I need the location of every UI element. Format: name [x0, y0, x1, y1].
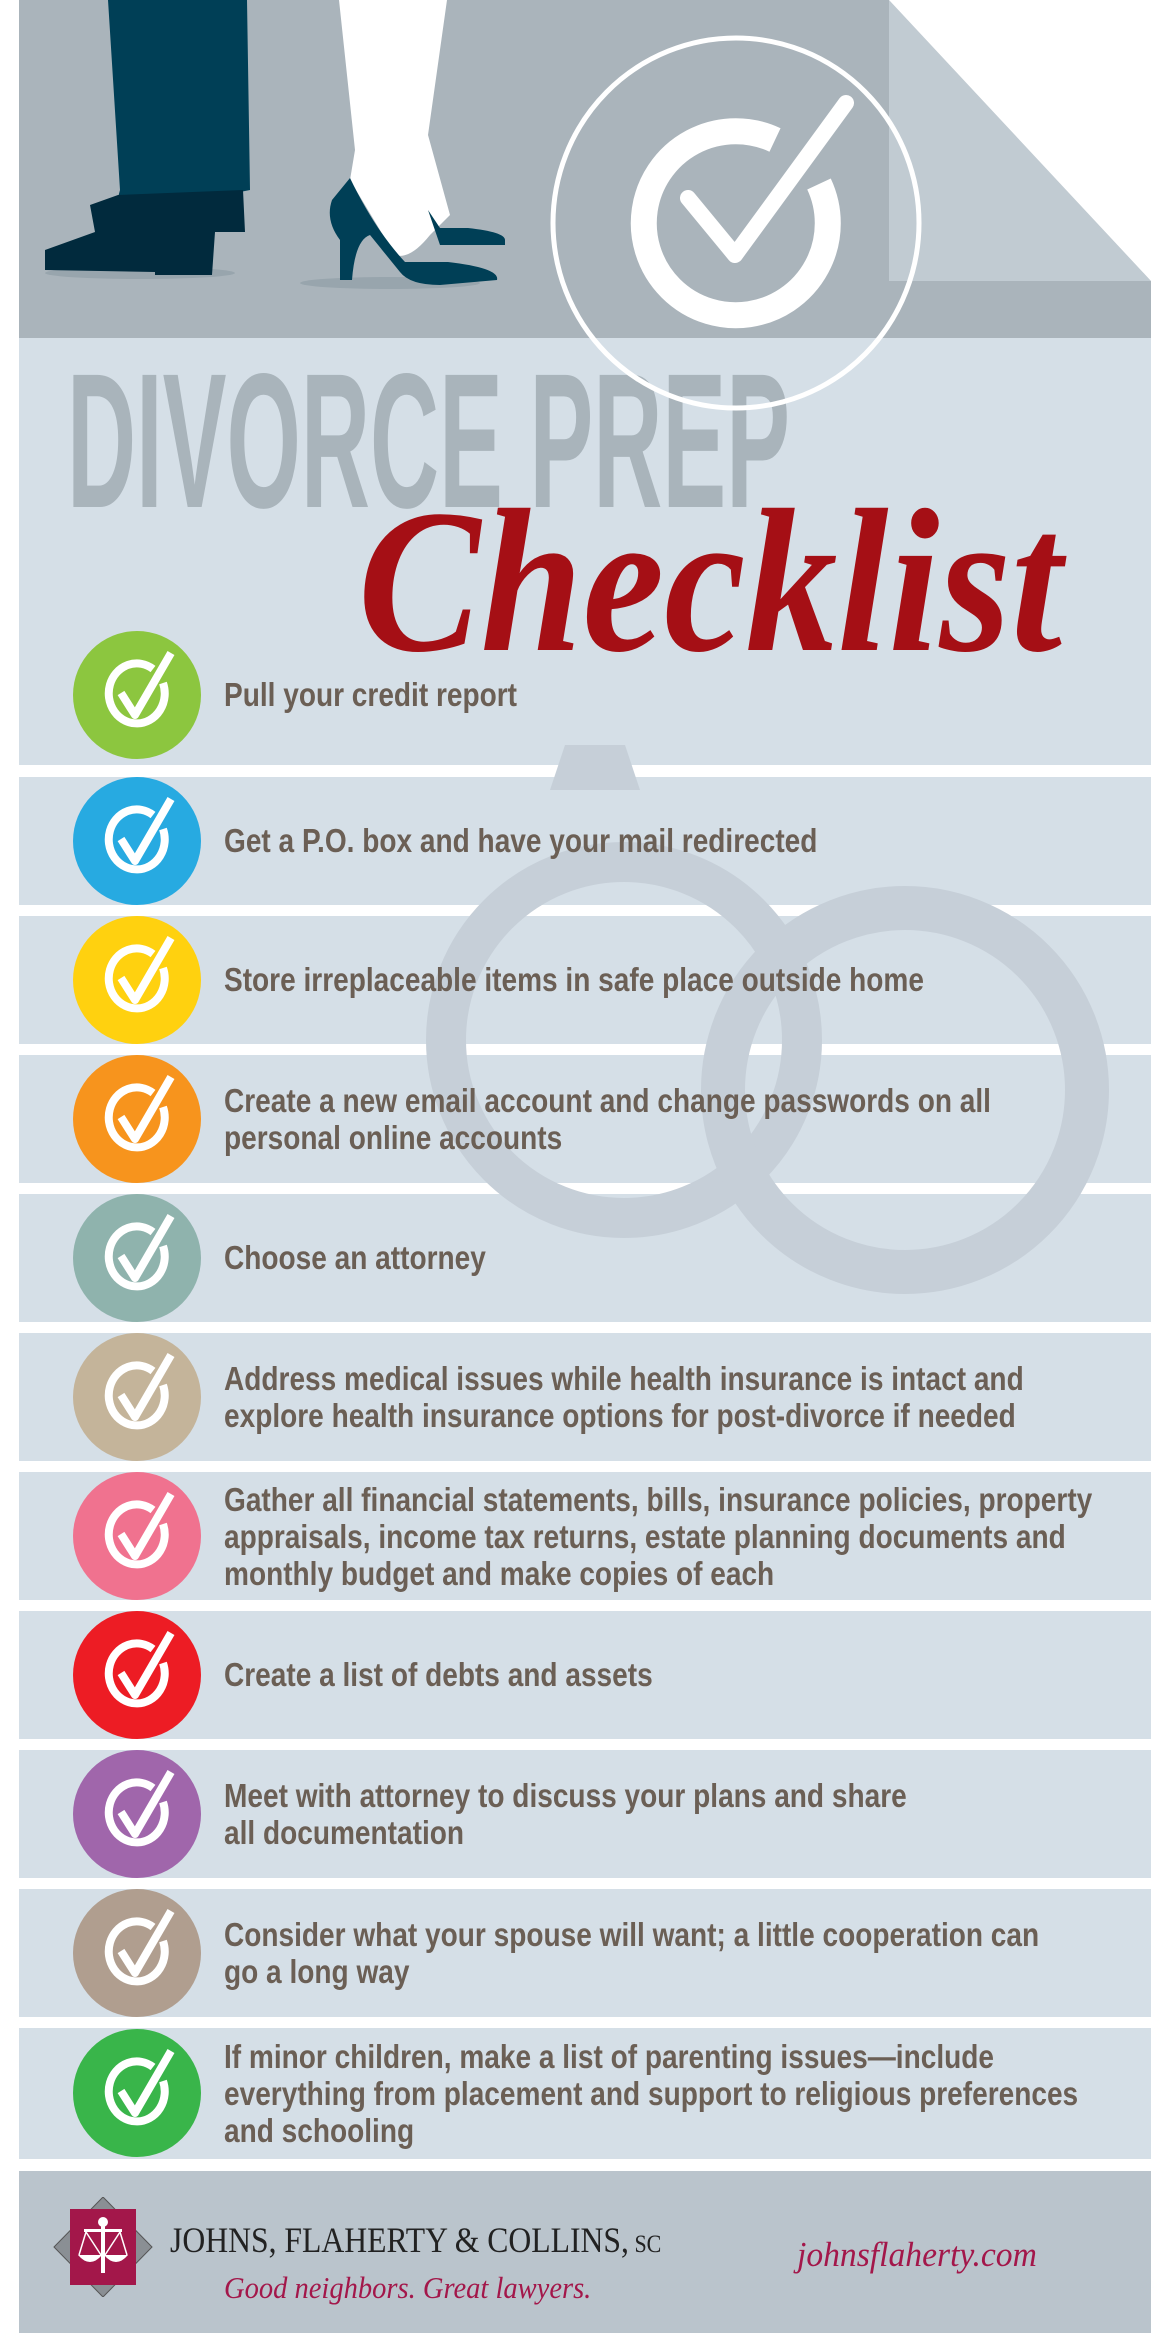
text: personal online accounts [224, 1119, 562, 1156]
text: Create a list of debts and assets [224, 1656, 653, 1693]
panel: row 3 [19, 916, 1151, 1044]
icon: orange check [73, 1055, 201, 1183]
panel: row 9 [19, 1750, 1151, 1878]
item 2 [73, 777, 817, 905]
text [224, 1082, 991, 1156]
title: DIVORCE PREP / Checklist and big check icon [67, 36, 1067, 680]
panel: row 5 [19, 1194, 1151, 1322]
panel: row 11 [19, 2028, 1151, 2159]
header background [19, 0, 1151, 338]
text: appraisals, income tax returns, estate planning documents and [224, 1518, 1066, 1555]
text: everything from placement and support to religious preferences [224, 2075, 1078, 2112]
item 5 [73, 1194, 486, 1322]
text: and schooling [224, 2112, 414, 2149]
text: Address medical issues while health insurance is intact and [224, 1360, 1024, 1397]
item 9 [73, 1750, 907, 1878]
illustration: man's trousers and shoes [45, 0, 250, 279]
item 1 [73, 631, 517, 759]
text [224, 2038, 1078, 2149]
icon: green check [73, 631, 201, 759]
company name: JOHNS, FLAHERTY & COLLINS, SC [170, 2220, 661, 2260]
text: Create a new email account and change passwords on all [224, 1082, 991, 1119]
icon: purple check [73, 1750, 201, 1878]
icon: blue check [73, 777, 201, 905]
panel: title and first item [19, 338, 1151, 765]
text: Gather all financial statements, bills, insurance policies, property [224, 1481, 1092, 1518]
item 11 [73, 2029, 1078, 2157]
icon: yellow check [73, 916, 201, 1044]
panel: row 10 [19, 1889, 1151, 2017]
icon: big check ring [553, 38, 919, 408]
logo: scales emblem [53, 2197, 153, 2297]
text: Meet with attorney to discuss your plans and share [224, 1777, 907, 1814]
panel: row 8 [19, 1611, 1151, 1739]
text [224, 1916, 1039, 1990]
tagline: Good neighbors. Great lawyers. [224, 2270, 591, 2305]
text: all documentation [224, 1814, 464, 1851]
item 8 [73, 1611, 653, 1739]
icon: green check [73, 2029, 201, 2157]
icon: pink check [73, 1472, 201, 1600]
icon: tan check [73, 1333, 201, 1461]
text: go a long way [224, 1953, 409, 1990]
text: Consider what your spouse will want; a little cooperation can [224, 1916, 1039, 1953]
text [224, 1481, 1092, 1592]
item 6 [73, 1333, 1024, 1461]
panel: row 4 [19, 1055, 1151, 1183]
text [224, 1777, 907, 1851]
icon: red check [73, 1611, 201, 1739]
item 3 [73, 916, 924, 1044]
icon: teal check [73, 1194, 201, 1322]
watermark: wedding rings [426, 745, 1109, 1294]
text: Choose an attorney [224, 1239, 486, 1276]
text: If minor children, make a list of parenting issues—include [224, 2038, 994, 2075]
illustration: woman's legs and heels [300, 0, 505, 289]
text: explore health insurance options for post-divorce if needed [224, 1397, 1016, 1434]
panel: row 7 [19, 1472, 1151, 1600]
text: Pull your credit report [224, 676, 517, 713]
icon: taupe check [73, 1889, 201, 2017]
panel: row 2 [19, 777, 1151, 905]
item 10 [73, 1889, 1039, 2017]
text [224, 1360, 1024, 1434]
item 7 [73, 1472, 1092, 1600]
text: monthly budget and make copies of each [224, 1555, 774, 1592]
panel: row 6 [19, 1333, 1151, 1461]
item 4 [73, 1055, 991, 1183]
text: Get a P.O. box and have your mail redirected [224, 822, 817, 859]
text: Store irreplaceable items in safe place outside home [224, 961, 924, 998]
footer [19, 2171, 1151, 2333]
website: johnsflaherty.com [797, 2235, 1037, 2274]
